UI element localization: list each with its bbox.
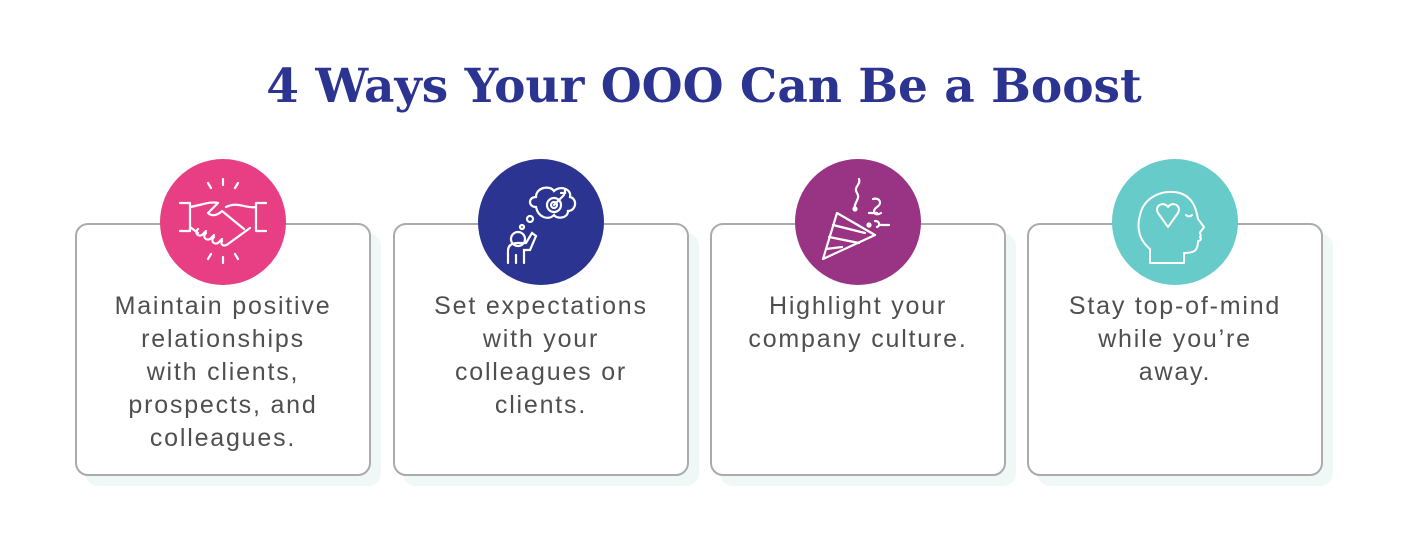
text: expectations: colleagues or [455,358,627,386]
text: relationships: prospects, and [128,391,318,419]
title: 4 Ways Your OOO Can Be a Boost [266,59,1142,114]
text: culture: Highlight your [769,292,947,320]
icon: target thought [478,159,604,285]
panel: top-of-mind [1027,223,1323,476]
panel: expectations [393,223,689,476]
text: expectations: Set expectations [434,292,648,320]
text: relationships [115,292,331,452]
text: top-of-mind: away. [1139,358,1211,386]
icon: party popper [795,159,921,285]
text: expectations: with your [483,325,599,353]
text: expectations [434,292,648,419]
icon: handshake [160,159,286,285]
text: relationships: colleagues. [150,424,296,452]
text: top-of-mind: Stay top-of-mind [1069,292,1281,320]
icon: head with heart [1112,159,1238,285]
panel: relationships [75,223,371,476]
text: relationships: relationships [141,325,305,353]
text: top-of-mind [1069,292,1281,386]
text: relationships: Maintain positive [115,292,331,320]
text: culture: company culture. [748,325,968,353]
text: culture [748,292,968,353]
text: relationships: with clients, [147,358,299,386]
text: top-of-mind: while you’re [1098,325,1252,353]
text: expectations: clients. [495,391,587,419]
panel: culture [710,223,1006,476]
